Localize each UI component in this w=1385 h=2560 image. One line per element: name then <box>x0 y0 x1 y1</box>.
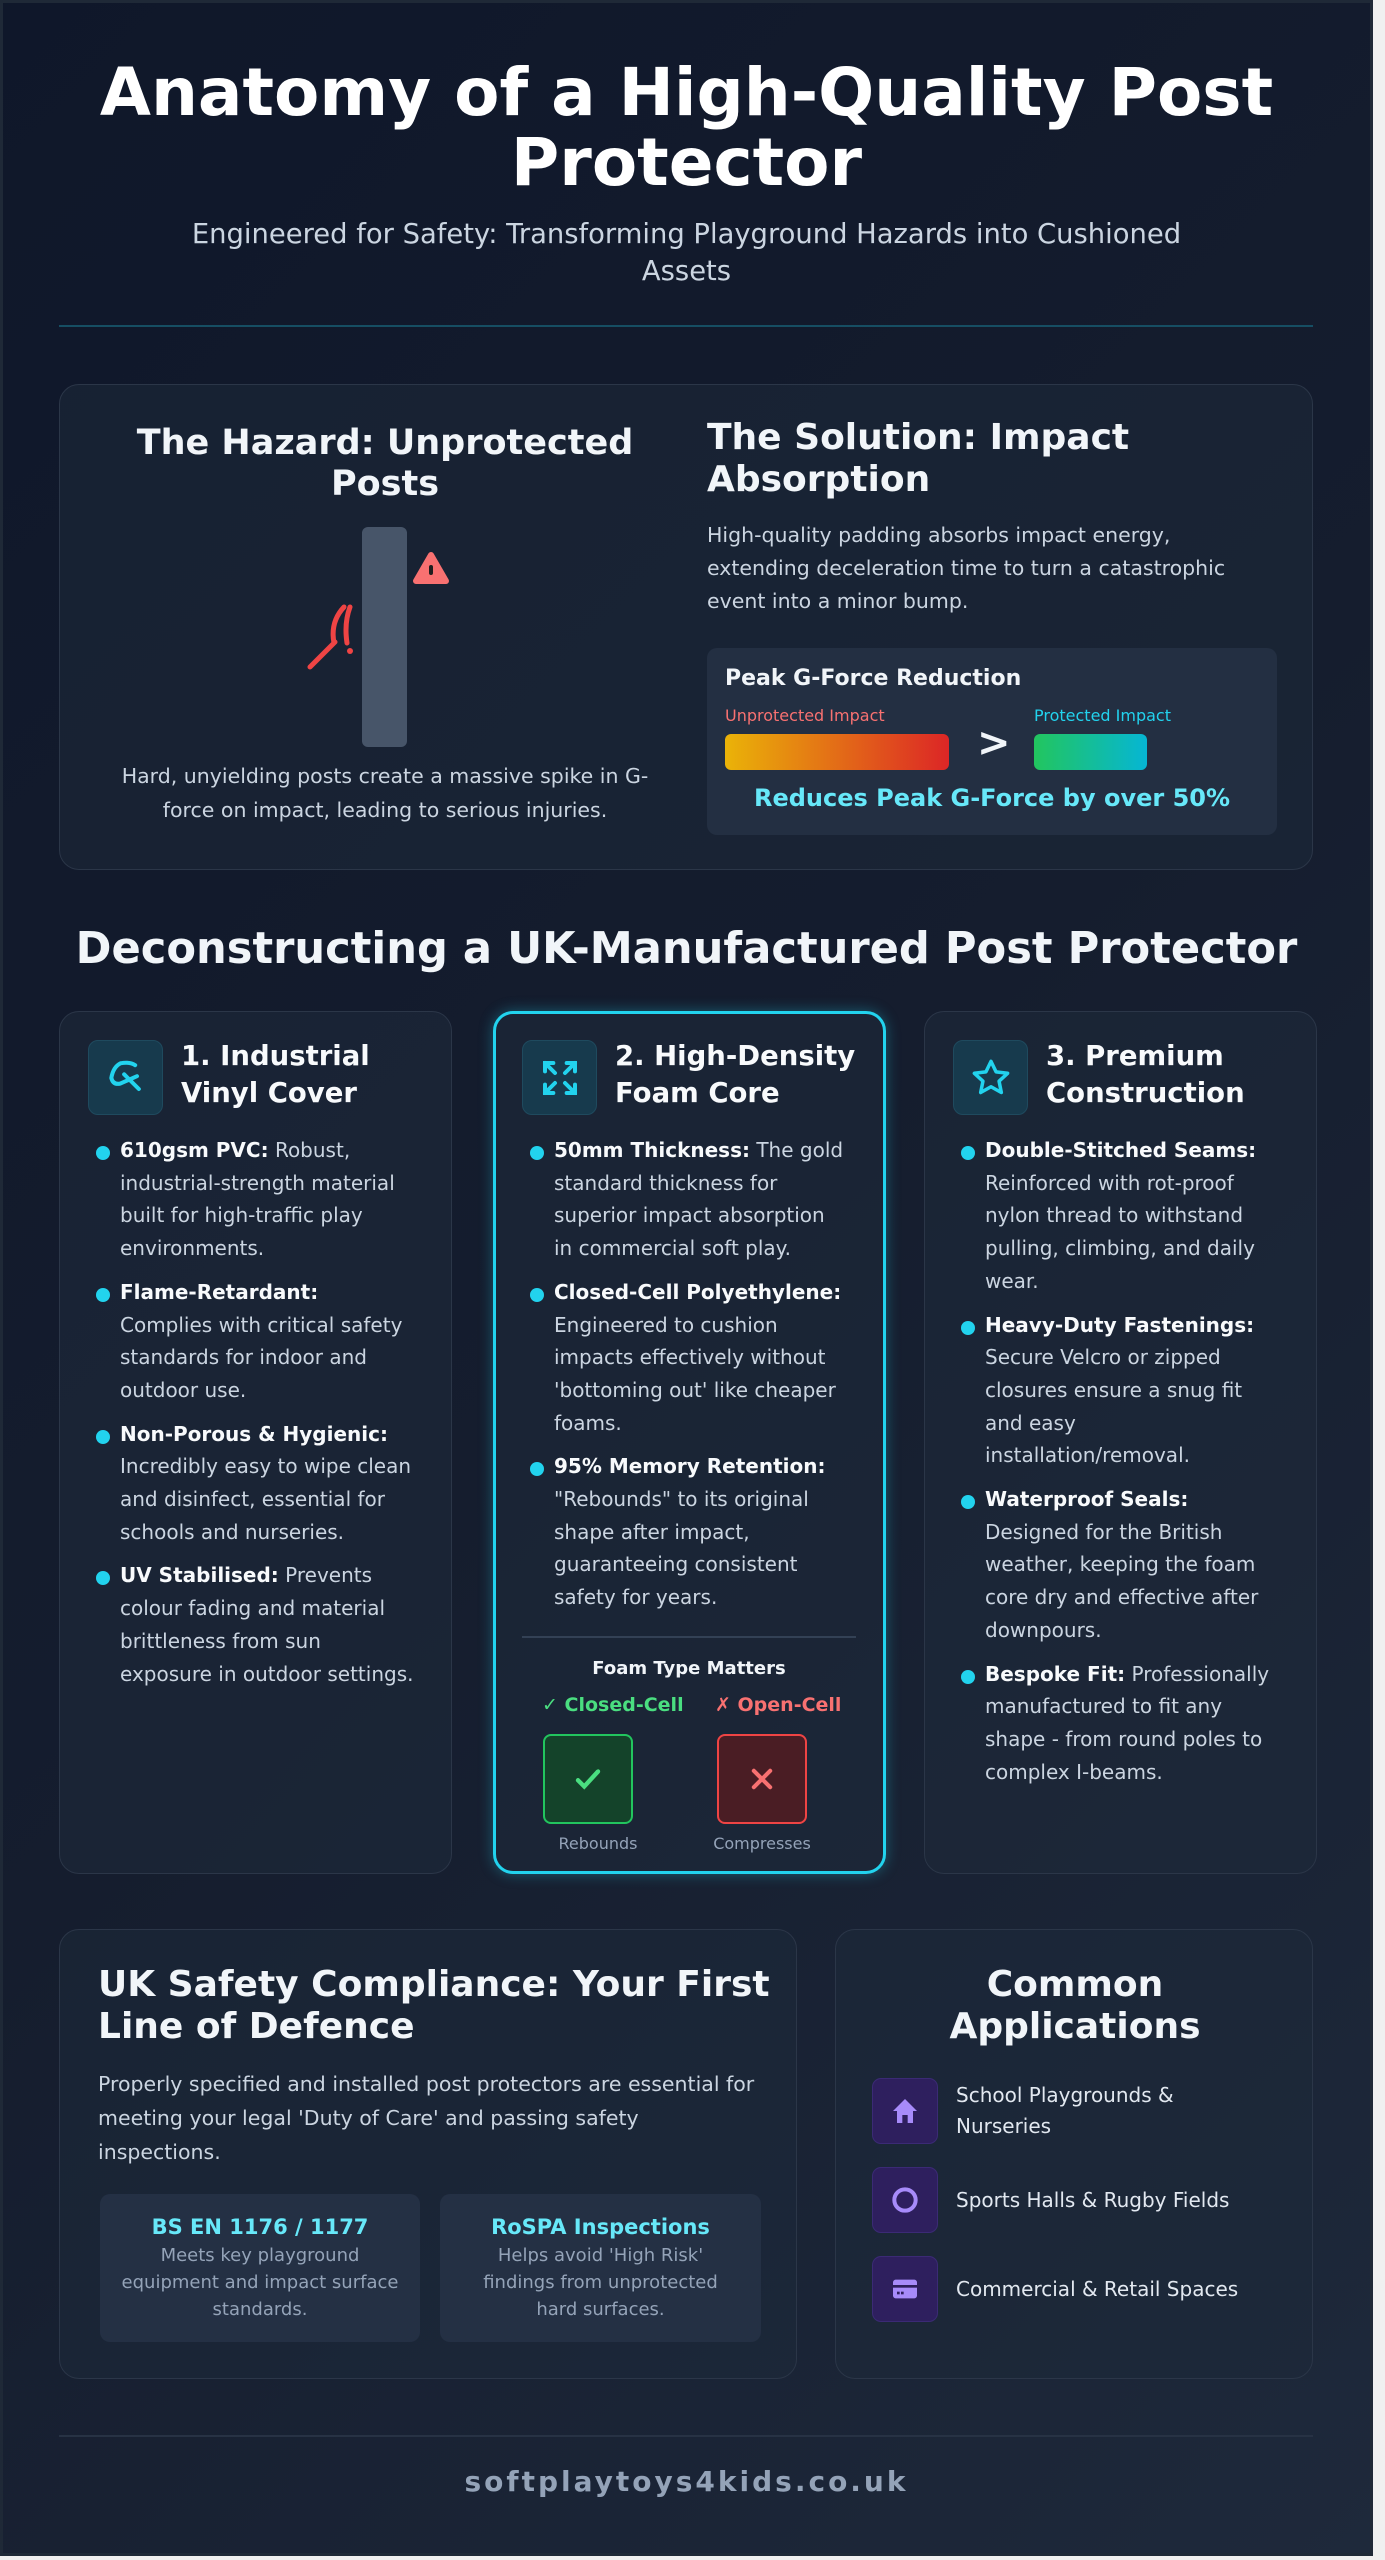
foam comparison: ✗ Open-Cell <box>715 1694 841 1716</box>
card 3: construction: Waterproof Seals: Designed for the British weather, keeping the foam core dry and effective after downpours. <box>985 1487 1258 1642</box>
icon: compress arrows <box>522 1040 597 1115</box>
app: sports: Sports Halls & Rugby Fields <box>956 2188 1229 2212</box>
heading: applications <box>949 1964 1201 2047</box>
card 3: construction: Double-Stitched Seams: Reinforced with rot-proof nylon thread to withstand pulling, climbing, and daily wear. <box>985 1138 1256 1293</box>
icon: star <box>953 1040 1028 1115</box>
box: BS EN: Meets key playground equipment and impact surface standards. <box>122 2245 398 2320</box>
app: school <box>872 2078 1174 2144</box>
card 2: foam core <box>493 1011 886 1874</box>
box: RoSPA <box>440 2194 761 2342</box>
card 2: foam core: Foam Core <box>615 1077 780 1109</box>
heading: hazard: The Hazard: Unprotected Posts <box>137 423 633 504</box>
text: solution: High-quality padding absorbs impact energy, extending deceleration time to turn a catastrophic event into a minor bump. <box>707 523 1225 613</box>
card 1: vinyl cover: 610gsm PVC: Robust, industrial-strength material built for high-traffic play environments. <box>120 1138 395 1260</box>
panel: applications <box>835 1929 1313 2379</box>
heading: solution: The Solution: Impact Absorption <box>707 417 1129 500</box>
card 1: vinyl cover: UV Stabilised: Prevents colour fading and material brittleness from sun exposure in outdoor settings. <box>120 1563 413 1686</box>
section heading: Deconstructing a UK-Manufactured Post Protector <box>76 924 1297 974</box>
card 2: foam core: 95% Memory Retention: "Rebounds" to its original shape after impact, guaranteeing consistent safety for years. <box>554 1454 825 1609</box>
card 1: vinyl cover <box>59 1011 452 1874</box>
foam comparison: Foam Type Matters <box>592 1658 786 1679</box>
app: school: School Playgrounds & <box>956 2083 1174 2107</box>
icon: vinyl <box>88 1040 163 1115</box>
card 2: foam core: 50mm Thickness: The gold standard thickness for superior impact absorption in commercial soft play. <box>554 1138 843 1260</box>
title: Anatomy of a High-Quality Post <box>100 54 1273 131</box>
chart: g-force: Peak G-Force Reduction <box>725 666 1021 691</box>
box: BS EN <box>100 2194 420 2342</box>
title: Protector <box>511 124 862 201</box>
chart: g-force: Unprotected Impact <box>725 706 885 725</box>
card 1: vinyl cover: Vinyl Cover <box>181 1077 357 1109</box>
panel: compliance <box>59 1929 797 2379</box>
card 1: vinyl cover: 1. Industrial <box>181 1040 370 1072</box>
foam comparison: Compresses <box>713 1834 811 1853</box>
app: commercial: Commercial & Retail Spaces <box>956 2276 1238 2300</box>
box: RoSPA: Helps avoid 'High Risk' findings from unprotected hard surfaces. <box>483 2245 718 2320</box>
heading: compliance: UK Safety Compliance: Your First Line of Defence <box>98 1964 770 2047</box>
card 1: vinyl cover: Flame-Retardant: Complies with critical safety standards for indoor and outdoor use. <box>120 1280 402 1402</box>
foam comparison: Rebounds <box>559 1834 637 1853</box>
app: sports <box>872 2167 1229 2233</box>
card 3: construction: 3. Premium <box>1046 1040 1224 1072</box>
box: BS EN: BS EN 1176 / 1177 <box>152 2215 368 2239</box>
card 3: construction <box>924 1011 1317 1874</box>
chart: g-force: Reduces Peak G-Force by over 50% <box>754 784 1230 812</box>
heading: applications: Common <box>987 1964 1163 2005</box>
card 3: construction: Bespoke Fit: Professionally manufactured to fit any shape - from round poles to complex I-beams. <box>985 1662 1269 1784</box>
chart: g-force <box>707 648 1277 835</box>
chart: g-force: > <box>977 720 1011 766</box>
card 3: construction: Heavy-Duty Fastenings: Secure Velcro or zipped closures ensure a snug fit and easy installation/removal. <box>985 1313 1254 1467</box>
panel: hazard vs solution <box>59 384 1313 870</box>
card 2: foam core: 2. High-Density <box>615 1040 855 1072</box>
caption: hazard: Hard, unyielding posts create a massive spike in G-force on impact, leading to serious injuries. <box>122 764 648 822</box>
footer: softplaytoys4kids.co.uk <box>464 2465 908 2498</box>
app: commercial <box>872 2256 1238 2322</box>
title <box>100 54 1273 201</box>
foam comparison: ✓ Closed-Cell <box>542 1694 684 1716</box>
text: compliance: Properly specified and installed post protectors are essential for meeting your legal 'Duty of Care' and passing safety inspections. <box>98 2072 754 2164</box>
app: school: Nurseries <box>956 2114 1051 2138</box>
subtitle: Engineered for Safety: Transforming Playground Hazards into Cushioned Assets <box>192 219 1181 287</box>
card 3: construction: Construction <box>1046 1077 1245 1109</box>
box: RoSPA: RoSPA Inspections <box>491 2215 710 2239</box>
chart: g-force: Protected Impact <box>1034 706 1171 725</box>
card 1: vinyl cover: Non-Porous & Hygienic: Incredibly easy to wipe clean and disinfect, essential for schools and nurseries. <box>120 1422 411 1544</box>
foam comparison <box>542 1658 841 1853</box>
card 2: foam core: Closed-Cell Polyethylene: Engineered to cushion impacts effectively without 'bottoming out' like cheaper foams. <box>554 1280 841 1435</box>
icon: post with impact <box>308 527 449 747</box>
heading: applications: Applications <box>949 2006 1201 2047</box>
